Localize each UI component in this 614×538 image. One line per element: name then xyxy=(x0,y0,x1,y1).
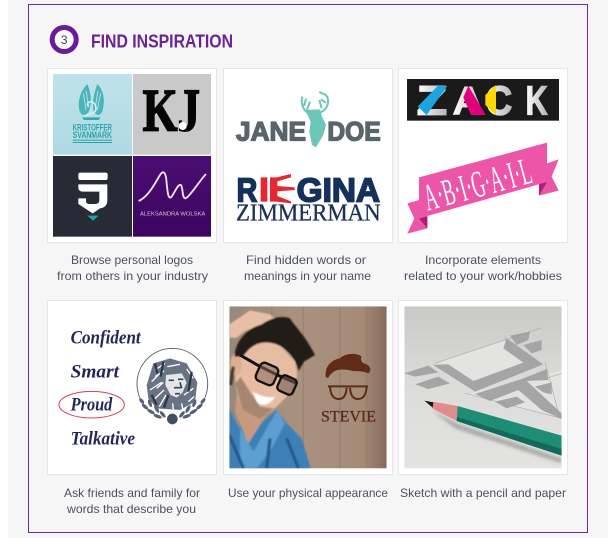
caption: browse personal logos: Browse personal logos xyxy=(71,253,193,267)
caption: ask friends: Ask friends and family for xyxy=(64,486,200,500)
logo: Zack: A xyxy=(452,77,485,123)
photo: smiling man with glasses xyxy=(229,306,387,468)
caption: hidden words: Find hidden words or xyxy=(246,253,366,267)
panel: pencil sketch card xyxy=(398,300,568,474)
word list: Talkative xyxy=(71,429,135,450)
caption: hidden words: meanings in your name xyxy=(244,269,371,283)
panel: hidden words card xyxy=(224,68,392,242)
photo: pencil and logo sketch xyxy=(404,306,562,468)
logo: Regina Zimmerman: GINA xyxy=(297,172,380,209)
logo: KJ monogram xyxy=(133,74,211,155)
panel: describing words card xyxy=(48,300,216,474)
logo: Stevie xyxy=(321,354,376,426)
logo: Kristoffer Svanmark xyxy=(53,74,132,155)
logo: Abigail ribbon xyxy=(407,143,559,234)
logo: Jane Doe xyxy=(236,92,381,147)
caption: work and hobbies: Incorporate elements xyxy=(425,253,541,267)
caption: ask friends: words that describe you xyxy=(66,502,196,516)
panel: personal logos card xyxy=(48,68,216,242)
logo: Aleksandra Wolska xyxy=(133,156,211,237)
logo: Regina Zimmerman: R xyxy=(237,172,257,209)
caption: work and hobbies xyxy=(404,253,562,283)
word list: Confident xyxy=(71,327,141,348)
logo: Zack: K xyxy=(526,77,548,123)
panel: physical appearance card xyxy=(224,300,392,474)
logo: Regina Zimmerman: ZIMMERMAN xyxy=(236,200,381,227)
caption: sketch: Sketch with a pencil and paper xyxy=(400,486,566,500)
caption: ask friends xyxy=(64,486,200,516)
logo: Kristoffer Svanmark: KRISTOFFER xyxy=(73,123,112,133)
word list: Proud xyxy=(70,395,113,416)
logo: Jane Doe: DOE xyxy=(327,117,381,147)
logo: Kristoffer Svanmark: SVANMARK xyxy=(73,130,112,140)
caption: browse personal logos xyxy=(57,253,208,283)
logo: dark monogram xyxy=(53,156,132,237)
word list xyxy=(70,327,141,450)
logo: Stevie: STEVIE xyxy=(321,409,376,426)
logo: Zack: C xyxy=(486,77,512,123)
logo: Regina Zimmerman xyxy=(236,172,381,227)
caption: physical appearance: Use your physical appearance xyxy=(228,486,388,500)
logo: KJ monogram: KJ xyxy=(143,78,200,145)
logo: Jane Doe: JANE xyxy=(236,117,306,147)
icon: lion crest xyxy=(137,348,208,424)
caption: work and hobbies: related to your work/hobbies xyxy=(404,269,562,283)
caption: hidden words xyxy=(244,253,371,283)
logo: Zack: Z xyxy=(417,77,447,123)
red ellipse highlight xyxy=(59,391,124,418)
caption: browse personal logos: from others in your industry xyxy=(57,269,208,283)
word list: Smart xyxy=(71,361,120,382)
title: FIND INSPIRATION xyxy=(91,30,233,52)
logo: Aleksandra Wolska: ALEKSANDRA WOLSKA xyxy=(140,211,206,217)
step number badge xyxy=(52,28,76,52)
logo: Zack xyxy=(407,77,559,123)
step number badge: 3 xyxy=(61,33,68,47)
panel: work elements card xyxy=(398,68,568,242)
